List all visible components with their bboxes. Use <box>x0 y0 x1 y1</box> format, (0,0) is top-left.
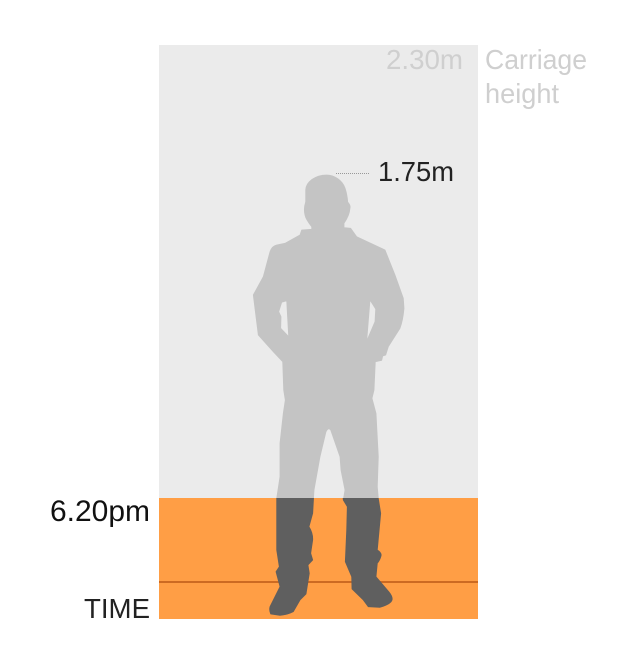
label: carriage height caption: height <box>485 78 559 109</box>
label: carriage height value: 2.30m <box>386 44 463 75</box>
label: time caption: TIME <box>84 593 150 624</box>
panel: water level <box>159 498 478 619</box>
line: floor level <box>159 581 478 583</box>
panel: carriage height <box>159 45 478 498</box>
infographic: carriage water level <box>52 45 586 619</box>
label: time value: 6.20pm <box>50 495 150 528</box>
label: carriage height caption <box>485 44 587 109</box>
figure: person silhouette above water <box>253 174 404 498</box>
leader line: person height <box>336 172 369 174</box>
label: person height: 1.75m <box>378 156 454 187</box>
figure: person silhouette below water <box>270 490 392 615</box>
label: carriage height caption: Carriage <box>485 44 587 75</box>
